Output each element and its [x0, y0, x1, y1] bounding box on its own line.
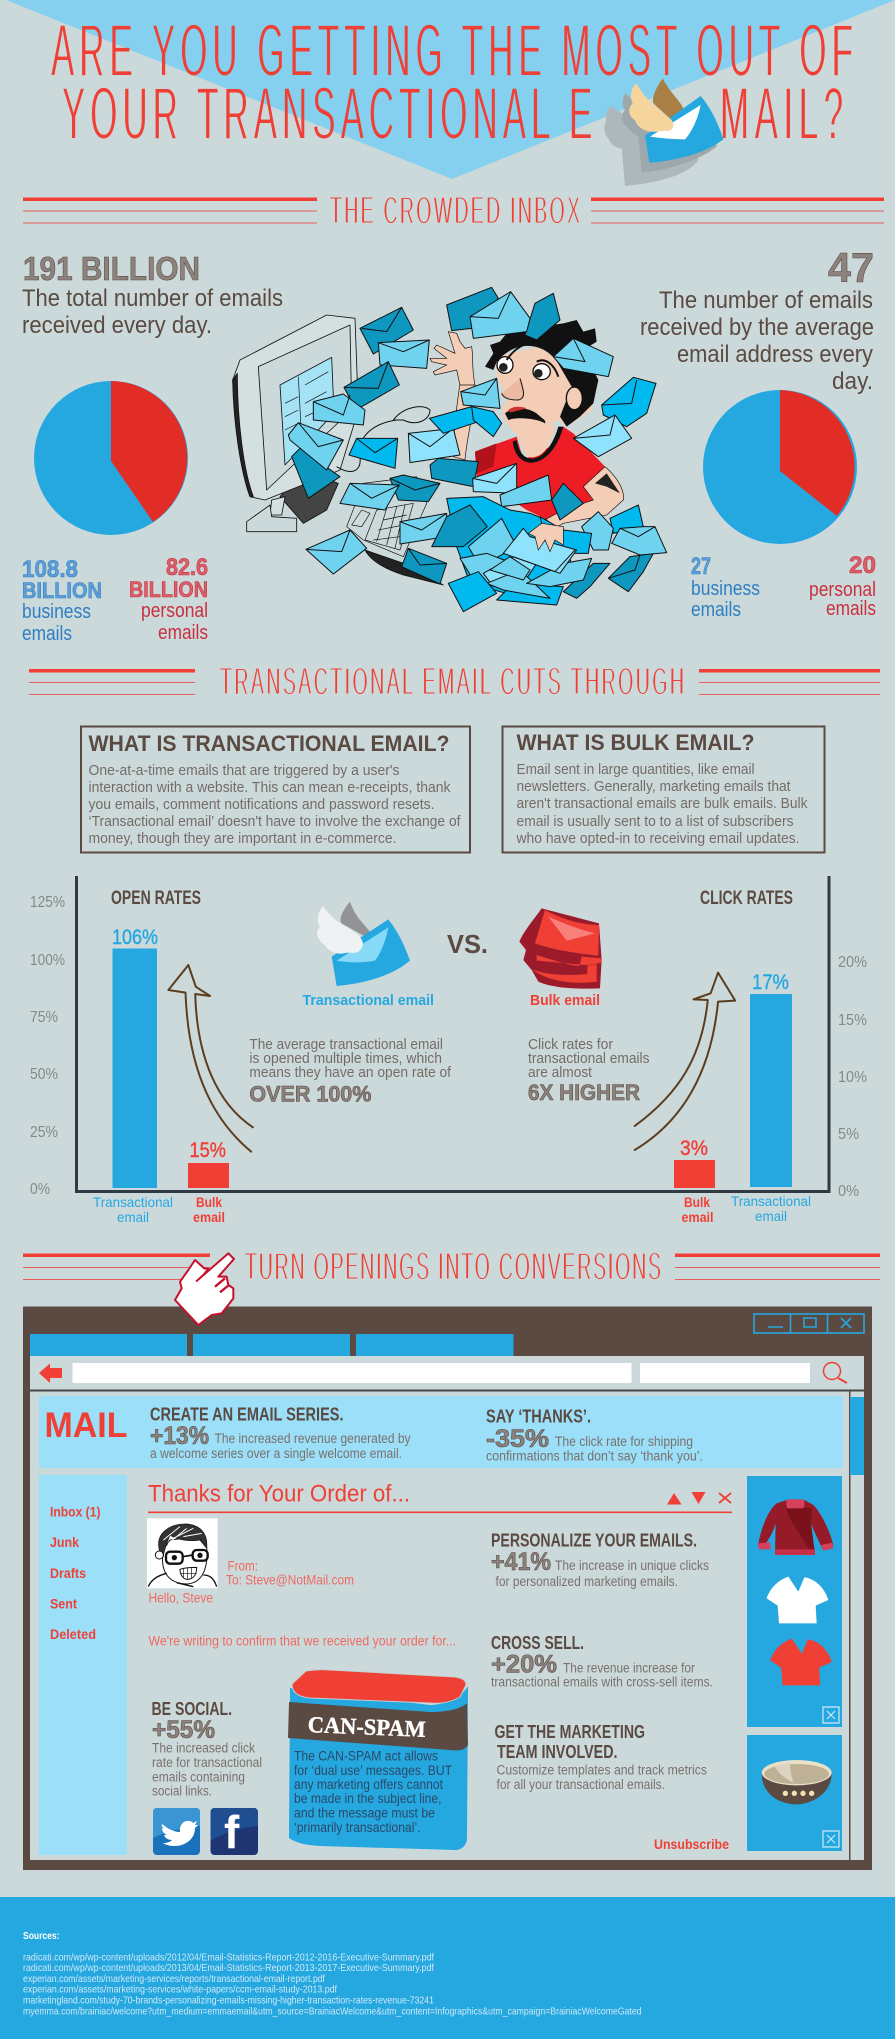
chart: click rate axis labels: 20%: [838, 954, 867, 971]
cursor hand icon: [175, 1253, 234, 1325]
arrow: open rate: [168, 965, 253, 1152]
label: transactional email: Transactional email: [302, 992, 434, 1009]
panel: what is bulk email: WHAT IS BULK EMAIL?: [516, 730, 754, 755]
panel: can-spam can: ‘primarily transactional’.: [294, 1820, 420, 1835]
chart: open rate axis labels: 0%: [30, 1181, 50, 1198]
tip: personalize your emails: The increase in unique clicks: [555, 1558, 709, 1573]
illustration: man buried in emails: [233, 287, 667, 612]
email headers: Hello, Steve: [148, 1590, 213, 1606]
bar: bulk open rate 15%: [188, 1139, 229, 1225]
stat: 47: The number of emails: [659, 287, 873, 314]
panel: what is bulk email: Email sent in large quantities, like email: [516, 762, 754, 778]
sidebar navigation: Drafts: [50, 1566, 86, 1581]
stat: 191 billion: [22, 250, 283, 339]
pie labels: right: personal: [809, 579, 876, 601]
chart title: click rates: CLICK RATES: [700, 888, 793, 909]
pie labels: left: [22, 554, 208, 645]
footer: sources: [0, 1897, 895, 2039]
panel: what is transactional email: WHAT IS TRANSACTIONAL EMAIL?: [88, 731, 450, 756]
arrow: click rate: [635, 973, 735, 1150]
panel: what is bulk email: [502, 726, 824, 852]
footer: sources: experian.com/assets/marketing-services/white-papers/ccm-email-study-2013.pdf: [23, 1984, 337, 1996]
section heading: turn openings into conversions: TURN OPENINGS INTO CONVERSIONS: [245, 1244, 661, 1288]
bar: bulk open rate 15%: Bulk: [196, 1194, 222, 1210]
chart: open rate axis labels: 75%: [30, 1009, 58, 1026]
icon: winged email logo: [604, 78, 723, 186]
chart: open rate axis labels: [30, 894, 65, 1198]
footer: sources: radicati.com/wp/wp-content/uploads/2013/04/Email-Statistics-Report-2013-2017-Executive-Summary.pdf: [23, 1962, 434, 1974]
tip: create an email series: CREATE AN EMAIL SERIES.: [150, 1404, 344, 1424]
panel: can-spam can: and the message must be: [294, 1806, 435, 1820]
tip: get the marketing team involved: Customize templates and track metrics: [496, 1762, 707, 1778]
stat: 47: received by the average: [640, 314, 874, 341]
unsubscribe link: Unsubscribe: [654, 1837, 729, 1852]
email subject heading: [148, 1480, 732, 1513]
chart: open rate axis labels: 125%: [30, 894, 65, 911]
pie labels: left: emails: [22, 623, 72, 645]
stat: 47: [640, 244, 874, 395]
text: open rate note: [249, 1037, 452, 1106]
close icon: [823, 1707, 839, 1723]
pie labels: left: BILLION: [129, 577, 208, 602]
sidebar navigation: Deleted: [50, 1627, 96, 1642]
chart: click rate axis labels: 0%: [838, 1183, 859, 1200]
chart: click rate axis labels: 5%: [838, 1126, 859, 1143]
sidebar navigation: Sent: [50, 1596, 77, 1612]
label: bulk email: Bulk email: [530, 992, 600, 1009]
sidebar navigation: Junk: [50, 1535, 79, 1550]
panel: can-spam can: any marketing offers cannot: [294, 1777, 443, 1792]
chart: open rate axis labels: 100%: [30, 952, 65, 969]
chart: click rate axis labels: [838, 954, 867, 1200]
sidebar navigation: Inbox (1): [50, 1504, 100, 1520]
panel: what is transactional email: you emails, comment notifications and password resets.: [88, 797, 434, 813]
tip: create an email series: [150, 1404, 411, 1461]
pie labels: right: 20: [849, 552, 876, 579]
tip: say thanks: The click rate for shipping: [555, 1434, 693, 1449]
panel: what is transactional email: [81, 726, 470, 852]
panel: what is transactional email: ‘Transactional email’ doesn't have to involve the exchange of: [88, 814, 461, 830]
bar: transactional click rate 17%: 17%: [752, 971, 789, 994]
panel: what is transactional email: money, though they are important in e-commerce.: [88, 831, 396, 847]
bar: transactional open rate 106%: [93, 926, 173, 1225]
tip: say thanks: confirmations that don’t say ‘thank you’.: [486, 1448, 703, 1464]
tip: cross sell: The revenue increase for: [563, 1660, 695, 1676]
panel: can-spam can: for ‘dual use’ messages. BUT: [294, 1763, 452, 1778]
text: open rate note: is opened multiple times, which: [249, 1051, 442, 1067]
tip: say thanks: [486, 1406, 703, 1464]
section heading: the crowded inbox: [23, 188, 884, 232]
section heading: transactional email cuts through: TRANSACTIONAL EMAIL CUTS THROUGH: [220, 659, 684, 703]
stat: 47: day.: [832, 368, 873, 395]
browser tabs: [30, 1334, 514, 1356]
mail banner: [39, 1396, 843, 1468]
bar: bulk click rate 3%: email: [682, 1209, 714, 1225]
footer: sources: radicati.com/wp/wp-content/uploads/2012/04/Email-Statistics-Report-2012-2016-Executive-Summary.pdf: [23, 1952, 434, 1964]
bar: transactional click rate 17%: Transactional: [731, 1193, 811, 1209]
stat: 191 billion: 191 BILLION: [23, 250, 200, 287]
icon: twitter: [153, 1808, 200, 1855]
icon: bowl: [762, 1760, 832, 1804]
header envelope flap triangle: [6, 0, 895, 179]
stat: 191 billion: The total number of emails: [22, 285, 283, 312]
tip: be social: BE SOCIAL.: [152, 1699, 232, 1719]
panel: what is bulk email: newsletters. Generally, marketing emails that: [516, 779, 790, 795]
tip: cross sell: transactional emails with cross-sell items.: [491, 1674, 713, 1690]
tip: be social: +55%: [152, 1716, 215, 1744]
text: click rate note: 6X HIGHER: [528, 1080, 640, 1105]
browser window buttons: [754, 1314, 864, 1333]
pie labels: left: 108.8: [22, 556, 78, 583]
browser window frame: [23, 1306, 872, 1870]
panel: what is transactional email: interaction with a website. This can mean e-receipts, thank: [88, 780, 451, 796]
icon: transactional email: [317, 902, 410, 986]
tip: personalize your emails: [491, 1530, 709, 1589]
bar: bulk click rate 3%: [674, 1137, 715, 1225]
mail banner: MAIL: [44, 1406, 128, 1445]
ad panel: clothing: [747, 1476, 842, 1727]
flying envelopes: [288, 287, 667, 612]
text: click rate note: Click rates for: [528, 1037, 613, 1053]
tip: personalize your emails: +41%: [491, 1548, 551, 1576]
pie chart: total emails: [34, 381, 188, 535]
icon: red sweater: [758, 1499, 833, 1555]
section heading: the crowded inbox: THE CROWDED INBOX: [330, 188, 580, 232]
chart: click rate axis labels: 15%: [838, 1012, 867, 1029]
icon: facebook: [210, 1806, 258, 1858]
bar: bulk open rate 15%: email: [193, 1209, 225, 1225]
tip: get the marketing team involved: for all your transactional emails.: [496, 1777, 665, 1792]
pie labels: left: business: [22, 601, 91, 623]
stat: 47: email address every: [677, 341, 873, 368]
chart: open rate axis labels: 50%: [30, 1066, 58, 1083]
pie labels: left: BILLION: [22, 578, 102, 603]
footer: sources: experian.com/assets/marketing-services/reports/transactional-email-report.pdf: [23, 1973, 325, 1985]
hand on pile: [528, 523, 563, 552]
browser toolbar: [39, 1362, 847, 1383]
chart: axes: [75, 876, 830, 1193]
icon: white t-shirt: [767, 1577, 828, 1623]
tip: create an email series: a welcome series over a single welcome email.: [150, 1446, 402, 1461]
footer: sources: marketingland.com/study-70-brands-personalizing-emails-missing-higher-transaction-rates-revenue-73241: [23, 1994, 434, 2006]
bar: transactional open rate 106%: 106%: [112, 926, 158, 949]
panel: what is bulk email: email is usually sent to to a list of subscribers: [516, 814, 794, 830]
bar: transactional click rate 17%: [731, 971, 811, 1224]
footer: sources: myemma.com/brainiac/welcome?utm_medium=emmaemail&utm_source=BrainiacWelcome&utm_content=Infographics&utm_campaign=BrainiacWelcomeGated: [23, 2006, 642, 2018]
tip: be social: The increased click: [152, 1740, 255, 1756]
text: open rate note: The average transactional email: [249, 1037, 443, 1053]
tip: create an email series: +13%: [150, 1422, 209, 1450]
tip: get the marketing team involved: TEAM INVOLVED.: [497, 1742, 618, 1762]
icon: facebook: f: [224, 1806, 240, 1858]
monitor and keyboard: [233, 315, 443, 585]
panel: can-spam can: [288, 1670, 468, 1850]
email headers: From:: [228, 1558, 258, 1574]
chart title: open rates: OPEN RATES: [111, 888, 201, 909]
bar: transactional click rate 17%: email: [755, 1208, 787, 1224]
text: open rate note: OVER 100%: [249, 1082, 371, 1106]
pie labels: left: personal: [141, 600, 208, 622]
bar: transactional open rate 106%: email: [117, 1209, 149, 1225]
tip: be social: rate for transactional: [152, 1755, 262, 1770]
tip: get the marketing team involved: GET THE MARKETING: [494, 1722, 645, 1742]
tip: create an email series: The increased revenue generated by: [214, 1431, 411, 1446]
icon: bulk email stack: [519, 908, 602, 989]
sidebar navigation: [39, 1475, 127, 1855]
man body: [453, 383, 475, 460]
tip: say thanks: SAY ‘THANKS’.: [486, 1406, 591, 1426]
tip: be social: social links.: [152, 1784, 212, 1798]
bar: bulk click rate 3%: Bulk: [684, 1194, 710, 1210]
tip: say thanks: -35%: [486, 1425, 549, 1453]
tip: be social: emails containing: [152, 1770, 245, 1784]
pie chart: average address: [703, 390, 857, 544]
email headers: To: Steve@NotMail.com: [226, 1572, 354, 1588]
text: click rate note: [528, 1037, 650, 1105]
tip: be social: [152, 1699, 262, 1798]
email headers: [148, 1558, 456, 1648]
pie labels: right: business: [691, 578, 760, 600]
footer: sources: Sources:: [23, 1930, 60, 1942]
stat: 191 billion: received every day.: [22, 312, 212, 339]
chart: open rate axis labels: 25%: [30, 1124, 58, 1141]
panel: can-spam can: CAN-SPAM: [307, 1712, 427, 1742]
email headers: We're writing to confirm that we received your order for...: [148, 1634, 456, 1648]
vs label: VS.: [447, 929, 488, 959]
avatar: steve: [147, 1518, 218, 1588]
ad panel: bowl: [747, 1735, 842, 1851]
pie labels: right: [691, 552, 876, 621]
tip: personalize your emails: for personalized marketing emails.: [496, 1574, 678, 1589]
pie labels: right: emails: [826, 598, 876, 620]
close icon: [823, 1831, 839, 1847]
title: YOUR TRANSACTIONAL E: [62, 74, 592, 156]
pie labels: left: emails: [158, 622, 208, 644]
panel: what is bulk email: aren't transactional emails are bulk emails. Bulk: [516, 796, 808, 812]
tip: personalize your emails: PERSONALIZE YOUR EMAILS.: [491, 1530, 697, 1550]
panel: can-spam can: The CAN-SPAM act allows: [294, 1748, 438, 1764]
title: ARE YOU GETTING THE MOST OUT OF: [51, 11, 853, 93]
tip: cross sell: [491, 1633, 713, 1690]
bar: bulk click rate 3%: 3%: [680, 1137, 708, 1160]
pie labels: right: 27: [691, 553, 711, 580]
stat: 47: 47: [828, 244, 874, 291]
pie labels: right: emails: [691, 599, 741, 621]
tip: get the marketing team involved: [494, 1722, 707, 1792]
tip: cross sell: CROSS SELL.: [491, 1633, 584, 1653]
text: open rate note: means they have an open rate of: [249, 1065, 452, 1081]
text: click rate note: are almost: [528, 1065, 592, 1081]
text: click rate note: transactional emails: [528, 1051, 650, 1067]
email subject heading: Thanks for Your Order of...: [148, 1480, 410, 1508]
bar: bulk open rate 15%: 15%: [190, 1139, 226, 1162]
title: MAIL?: [720, 74, 843, 156]
tip: cross sell: +20%: [491, 1650, 557, 1678]
section heading: transactional email cuts through: [29, 659, 880, 703]
chart: click rate axis labels: 10%: [838, 1069, 867, 1086]
pie labels: left: 82.6: [166, 554, 208, 581]
panel: what is bulk email: who have opted-in to receiving email updates.: [516, 831, 800, 847]
icon: red t-shirt: [770, 1639, 832, 1685]
panel: what is transactional email: One-at-a-time emails that are triggered by a user's: [88, 763, 400, 779]
bar: transactional open rate 106%: Transactional: [93, 1194, 173, 1210]
section heading: turn openings into conversions: [23, 1244, 880, 1288]
title: [51, 11, 853, 156]
panel: can-spam can: be made in the subject line,: [294, 1791, 442, 1806]
